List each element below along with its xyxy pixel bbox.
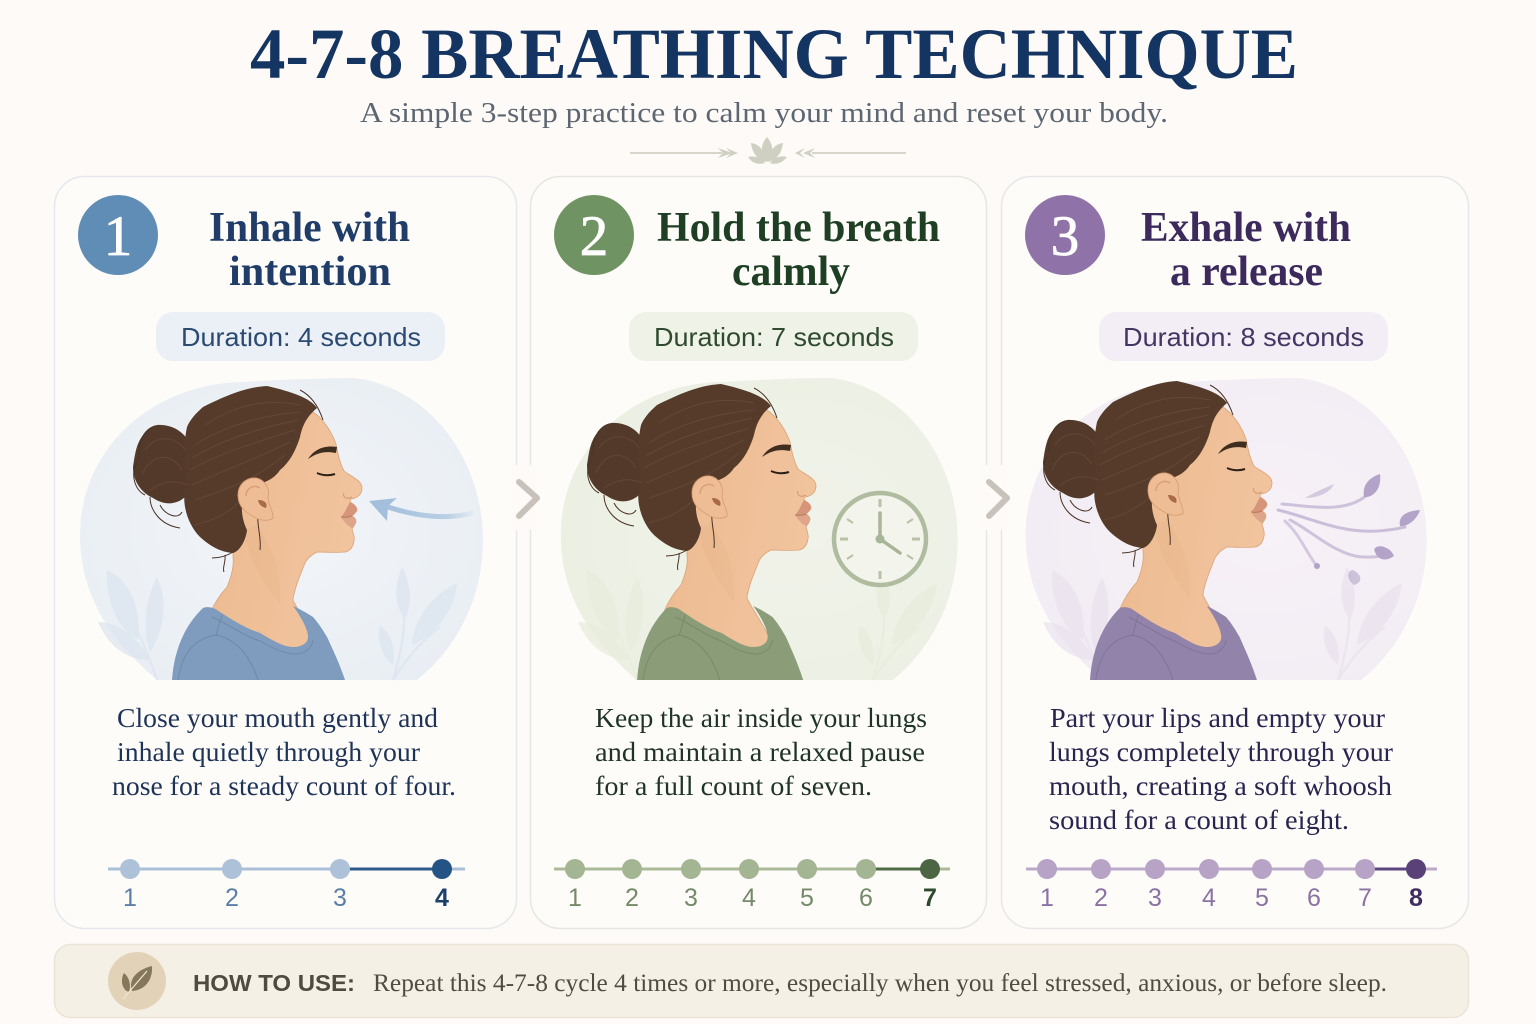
timeline 2: 4 bbox=[742, 884, 756, 912]
arrow: step 2 to step 3 bbox=[983, 465, 1007, 530]
card 2 bbox=[530, 176, 986, 928]
arrow: step 1 to step 2 bbox=[512, 465, 537, 530]
timeline 3: 2 bbox=[1094, 884, 1108, 912]
timeline 1: 4 bbox=[435, 884, 449, 912]
timeline 2 bbox=[554, 859, 950, 912]
timeline 1: 3 bbox=[333, 884, 347, 912]
timeline 2: 3 bbox=[684, 884, 698, 912]
timeline 3: 8 bbox=[1409, 884, 1423, 912]
timeline 3 bbox=[1026, 859, 1437, 912]
body text 2: and maintain a relaxed pause bbox=[595, 736, 925, 767]
body text 3: Part your lips and empty your bbox=[1050, 702, 1385, 733]
timeline 3: 1 bbox=[1040, 884, 1054, 912]
timeline 1 bbox=[108, 859, 465, 912]
icon: clock bbox=[834, 493, 926, 585]
timeline 3: 6 bbox=[1307, 884, 1321, 912]
illustration: inhale bbox=[80, 378, 483, 680]
body text 2: for a full count of seven. bbox=[595, 770, 872, 801]
timeline 2: 1 bbox=[568, 884, 582, 912]
heading 3: a release bbox=[1170, 249, 1323, 295]
heading 3 bbox=[1141, 205, 1351, 295]
heading 2: Hold the breath bbox=[657, 205, 940, 251]
duration pill 1 bbox=[156, 312, 445, 361]
timeline 2: 7 bbox=[923, 884, 937, 912]
duration pill 3 bbox=[1099, 312, 1388, 361]
badge 1 bbox=[78, 195, 158, 275]
icon: leaf badge bbox=[108, 952, 166, 1010]
body text 3: sound for a count of eight. bbox=[1049, 804, 1349, 835]
how to use label: HOW TO USE: bbox=[193, 970, 355, 996]
duration pill 3: Duration: 8 seconds bbox=[1123, 322, 1364, 352]
timeline 3: 7 bbox=[1358, 884, 1372, 912]
badge 1: 1 bbox=[104, 205, 132, 268]
panel: how to use bbox=[54, 944, 1468, 1018]
duration pill 2 bbox=[629, 312, 918, 361]
body text 1: inhale quietly through your bbox=[117, 736, 420, 767]
heading 1 bbox=[209, 205, 410, 295]
timeline 2: 5 bbox=[800, 884, 814, 912]
badge 3: 3 bbox=[1051, 205, 1079, 268]
duration pill 1: Duration: 4 seconds bbox=[181, 322, 421, 352]
body text 1 bbox=[112, 702, 456, 801]
badge 3 bbox=[1025, 195, 1105, 275]
body text 2 bbox=[595, 702, 927, 801]
card 3 bbox=[1002, 176, 1468, 928]
timeline 3: 3 bbox=[1148, 884, 1162, 912]
timeline 1: 1 bbox=[123, 884, 137, 912]
ornament: lotus with arrows bbox=[630, 137, 906, 164]
timeline 2: 2 bbox=[625, 884, 639, 912]
arrow: air flowing into nose bbox=[369, 498, 473, 521]
body text 3: mouth, creating a soft whoosh bbox=[1049, 770, 1392, 801]
title: 4-7-8 BREATHING TECHNIQUE bbox=[250, 14, 1298, 94]
panel: step 3 exhale bbox=[1002, 176, 1468, 928]
breath streams with leaves bbox=[1278, 474, 1420, 585]
badge 2 bbox=[554, 195, 634, 275]
body text 3: lungs completely through your bbox=[1049, 736, 1393, 767]
heading 1: Inhale with bbox=[209, 205, 410, 251]
duration pill 2: Duration: 7 seconds bbox=[654, 322, 894, 352]
timeline 3: 5 bbox=[1255, 884, 1269, 912]
how to use text: Repeat this 4-7-8 cycle 4 times or more, especially when you feel stressed, anxious, or before sleep. bbox=[373, 970, 1387, 997]
panel: step 2 hold bbox=[530, 176, 986, 928]
timeline 1: 2 bbox=[225, 884, 239, 912]
heading 1: intention bbox=[229, 249, 391, 295]
body text 2: Keep the air inside your lungs bbox=[595, 702, 927, 733]
badge 2: 2 bbox=[580, 205, 608, 268]
body text 1: nose for a steady count of four. bbox=[112, 770, 456, 801]
heading 3: Exhale with bbox=[1141, 205, 1351, 251]
illustration: exhale bbox=[1026, 378, 1427, 680]
body text 3 bbox=[1049, 702, 1393, 835]
timeline 2: 6 bbox=[859, 884, 873, 912]
timeline 3: 4 bbox=[1202, 884, 1216, 912]
panel: step 1 inhale bbox=[54, 176, 516, 928]
body text 1: Close your mouth gently and bbox=[117, 702, 438, 733]
heading 2: calmly bbox=[732, 249, 850, 295]
illustration: hold bbox=[561, 378, 958, 680]
heading 2 bbox=[657, 205, 940, 295]
subtitle: A simple 3-step practice to calm your mind and reset your body. bbox=[360, 97, 1168, 129]
card 1 bbox=[54, 176, 516, 928]
